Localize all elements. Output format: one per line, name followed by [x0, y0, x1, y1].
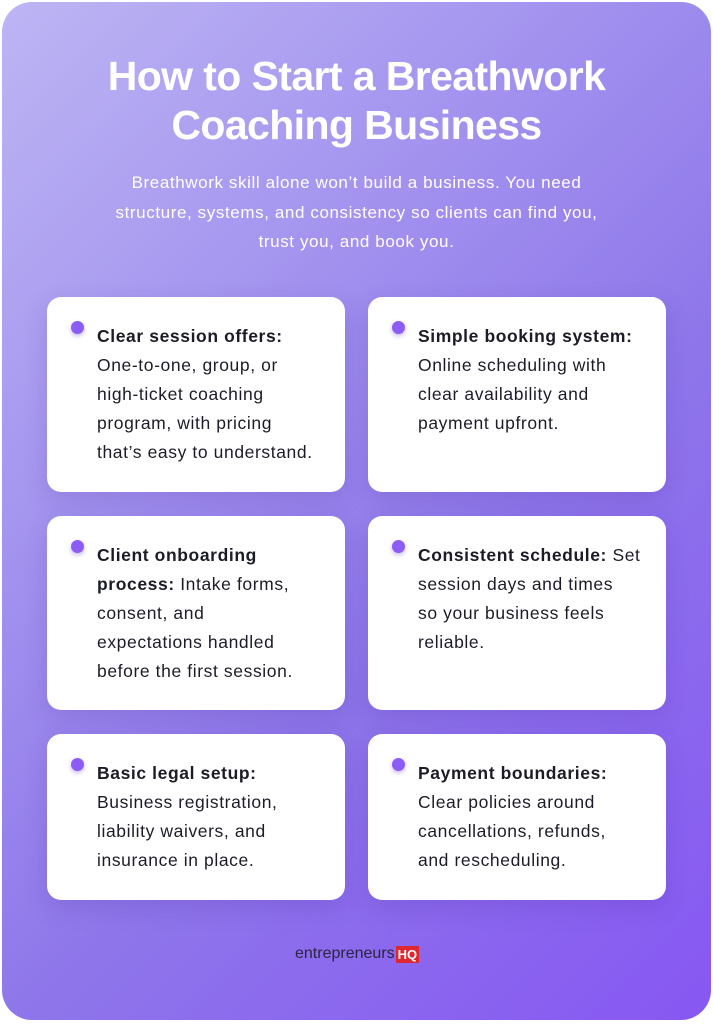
icon: dot — [71, 540, 84, 553]
icon: dot — [392, 758, 405, 771]
text: reliable. — [418, 632, 485, 652]
card: payment boundaries — [368, 734, 666, 900]
text — [418, 763, 607, 870]
card: consistent schedule — [368, 516, 666, 710]
text: before the first session. — [97, 661, 293, 681]
subtitle: trust you, and book you. — [259, 232, 454, 251]
text: One-to-one, group, or — [97, 355, 278, 375]
text: consent, and — [97, 603, 204, 623]
card: simple booking system — [368, 297, 666, 492]
logo: HQ — [398, 946, 417, 962]
card: clear session offers — [47, 297, 345, 492]
logo: entrepreneurs — [295, 945, 395, 962]
title: How to Start a Breathwork — [108, 53, 605, 99]
text: Client onboarding — [97, 545, 257, 565]
title — [108, 53, 606, 148]
text: program, with pricing — [97, 413, 272, 433]
text: liability waivers, and — [97, 821, 266, 841]
text: cancellations, refunds, — [418, 821, 606, 841]
card: client onboarding — [47, 516, 345, 710]
icon: dot — [71, 758, 84, 771]
icon: dot — [392, 540, 405, 553]
text: Business registration, — [97, 792, 278, 812]
text — [97, 326, 313, 462]
text: process: Intake forms, — [97, 574, 289, 594]
text: Consistent schedule: Set — [418, 545, 641, 565]
text: payment upfront. — [418, 413, 559, 433]
text: insurance in place. — [97, 850, 254, 870]
subtitle: structure, systems, and consistency so clients can find you, — [116, 202, 597, 222]
text: Clear policies around — [418, 792, 595, 812]
text: high-ticket coaching — [97, 384, 264, 404]
text — [418, 545, 641, 652]
text: Payment boundaries: — [418, 763, 607, 783]
text: so your business feels — [418, 603, 604, 623]
icon: dot — [392, 321, 405, 334]
subtitle — [116, 173, 597, 251]
title: Coaching Business — [171, 102, 542, 148]
text — [97, 763, 278, 870]
text: Online scheduling with — [418, 355, 606, 375]
text: expectations handled — [97, 632, 274, 652]
text: and rescheduling. — [418, 850, 566, 870]
text: Simple booking system: — [418, 326, 632, 346]
text — [418, 326, 632, 433]
text: Basic legal setup: — [97, 763, 257, 783]
text: session days and times — [418, 574, 613, 594]
icon: dot — [71, 321, 84, 334]
text: Clear session offers: — [97, 326, 283, 346]
text — [97, 545, 293, 681]
card: basic legal setup — [47, 734, 345, 900]
subtitle: Breathwork skill alone won’t build a business. You need — [132, 173, 581, 192]
text: clear availability and — [418, 384, 589, 404]
text: that’s easy to understand. — [97, 442, 313, 462]
